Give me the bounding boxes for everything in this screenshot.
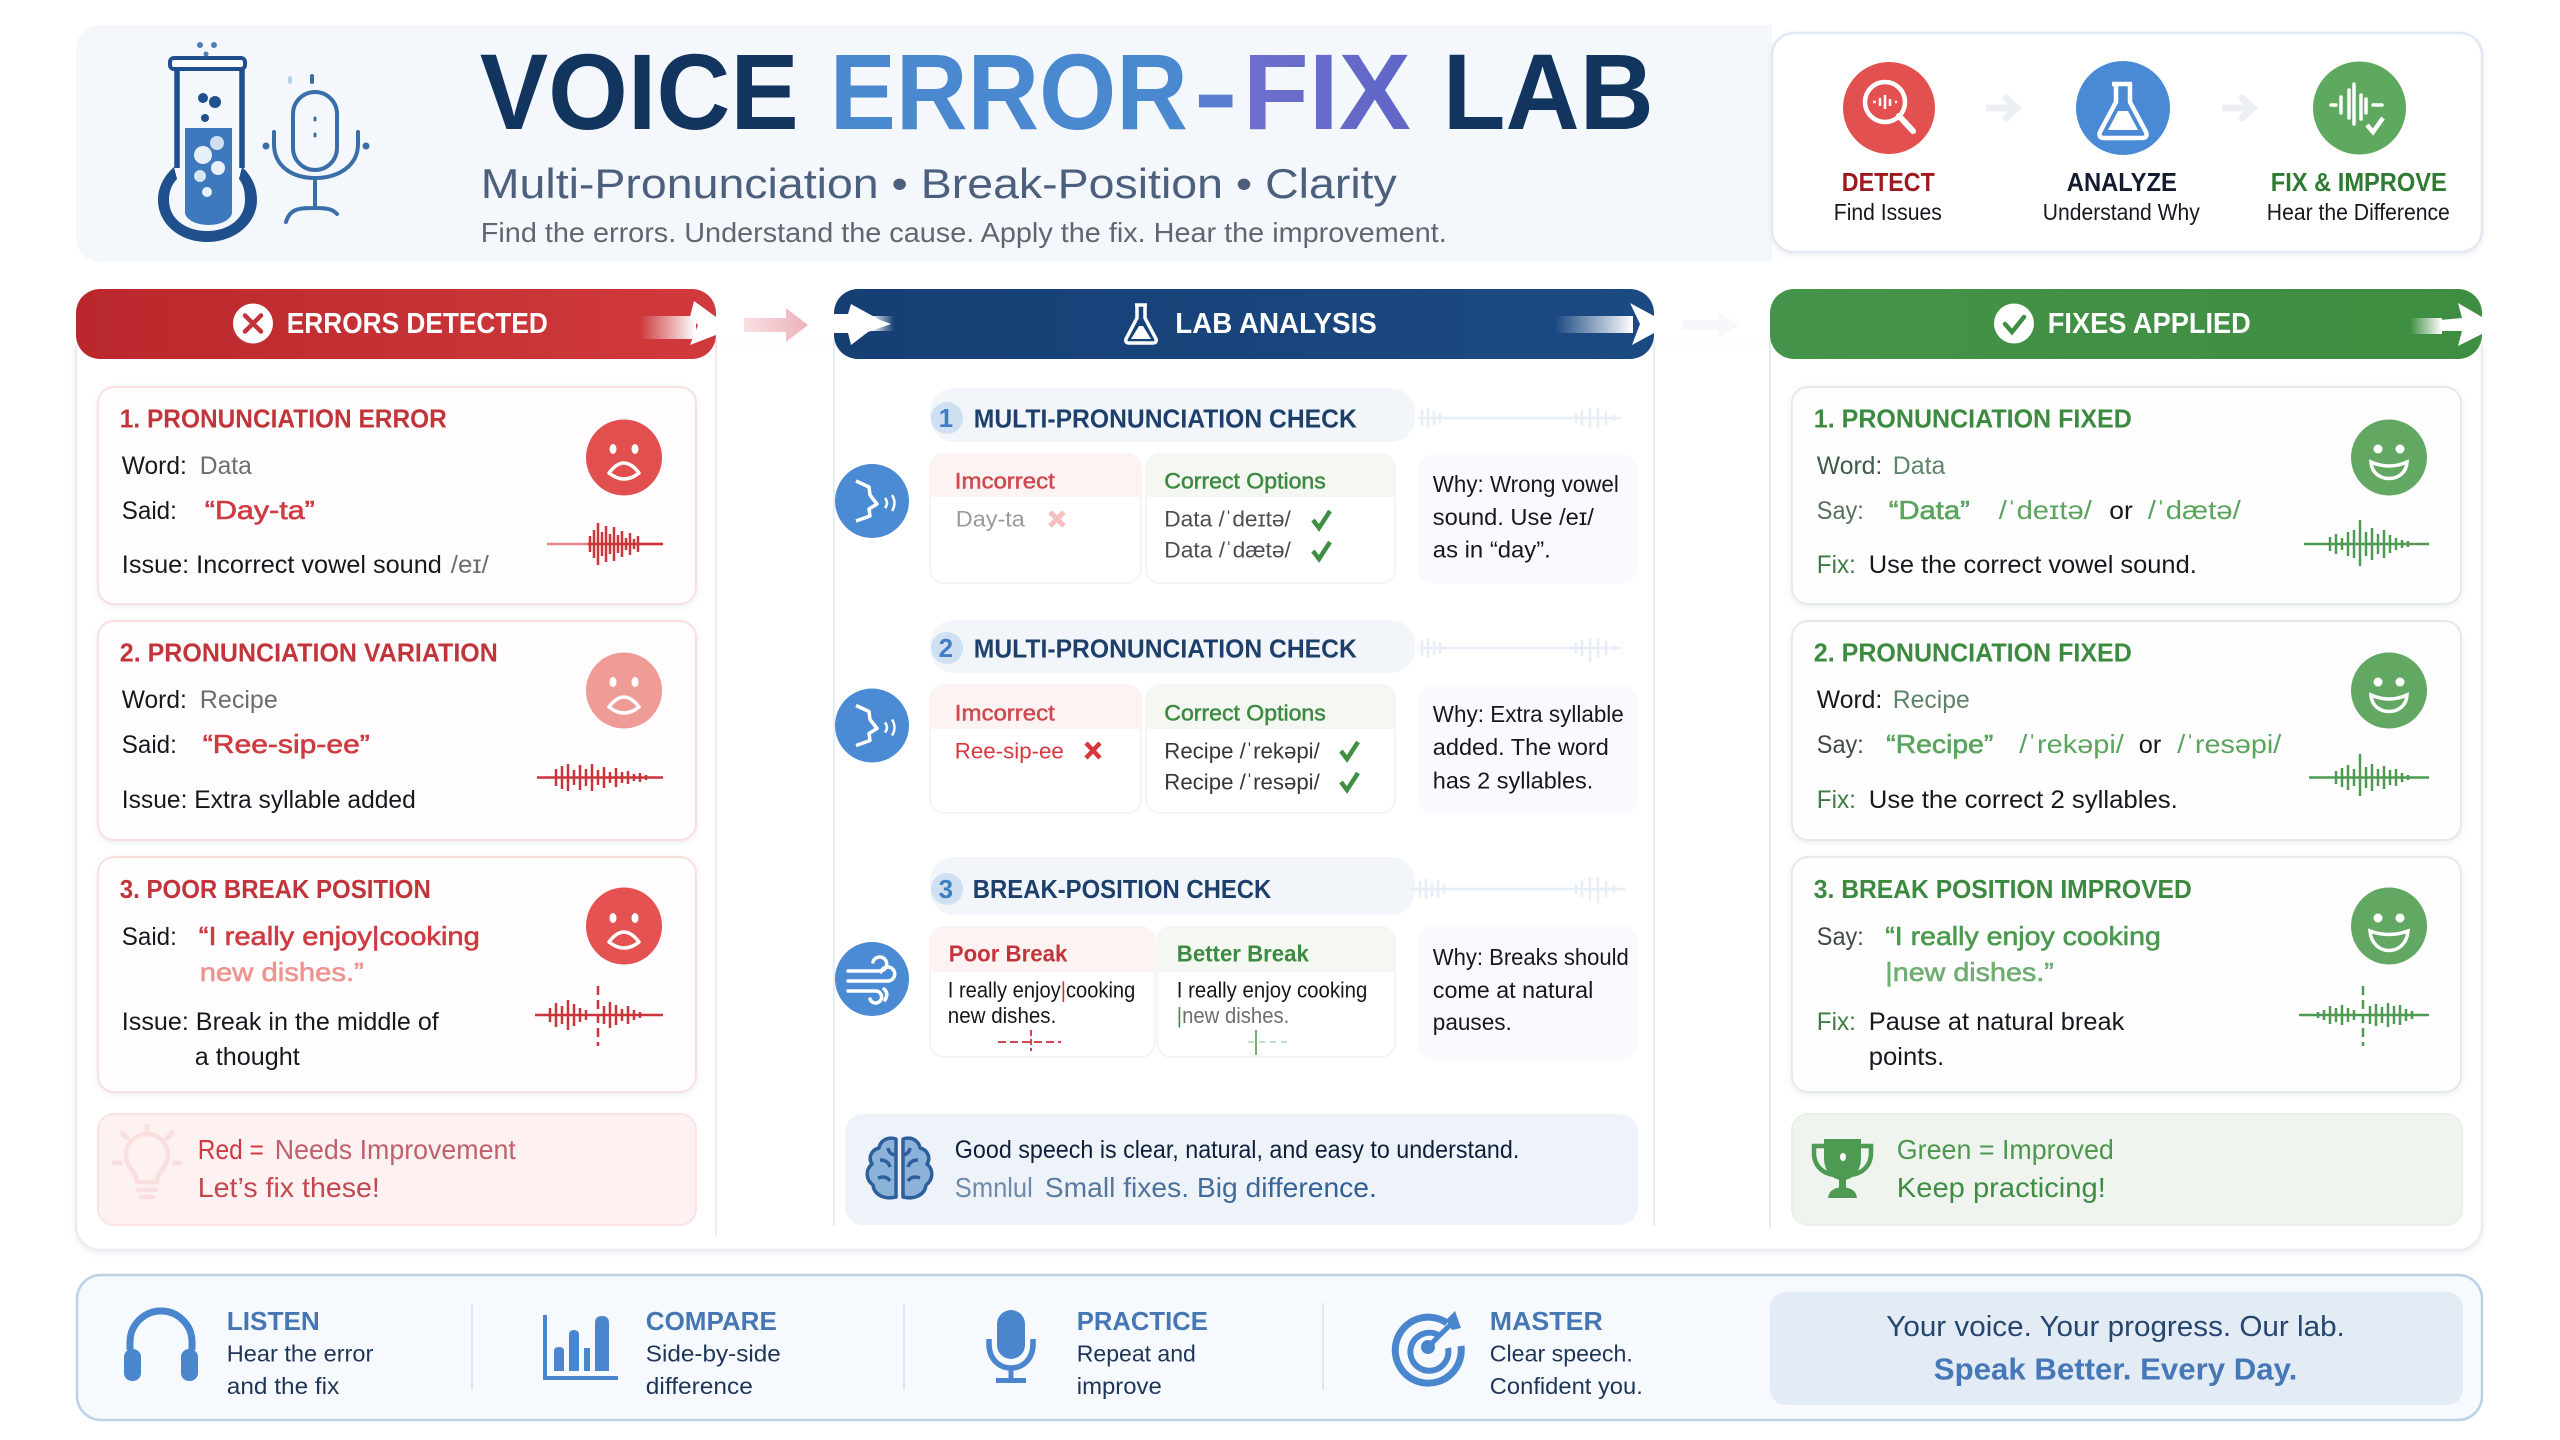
icon: test tube with bubbles — [158, 42, 257, 242]
card: why: come at natural — [1433, 977, 1593, 1003]
card: pronunciation fixed 1: Use the correct vowel sound. — [1869, 551, 2197, 579]
card: why: has 2 syllables. — [1433, 768, 1593, 794]
item: listen: and the fix — [227, 1373, 340, 1399]
icon: happy face — [2351, 420, 2427, 496]
panel: fixes applied — [1770, 289, 2482, 1228]
section heading: MULTI-PRONUNCIATION CHECK — [974, 404, 1357, 434]
callout: speak better — [1770, 1292, 2463, 1405]
card: why: pauses. — [1433, 1009, 1512, 1035]
item: compare: COMPARE — [646, 1306, 777, 1336]
card: pronunciation fixed 2: or — [2139, 731, 2161, 759]
card: poor break position: new dishes.” — [200, 957, 364, 987]
item: master: Confident you. — [1490, 1373, 1643, 1399]
card: correct options: Data /ˈdætə/ — [1164, 538, 1292, 562]
footer bar — [77, 1275, 2482, 1420]
card: correct options: Recipe /ˈrekəpi/ — [1164, 738, 1321, 764]
section heading — [930, 388, 1621, 442]
callout: speak better: Speak Better. Every Day. — [1934, 1352, 2297, 1386]
section 2: multi-pronunciation check — [835, 620, 1638, 815]
card: pronunciation fixed 2: Recipe — [1893, 686, 1970, 714]
card: why: added. The word — [1433, 734, 1609, 760]
card: poor break position: 3. POOR BREAK POSITION — [120, 874, 431, 904]
waveform with natural break — [2299, 1003, 2429, 1027]
card: pronunciation variation: 2. PRONUNCIATION VARIATION — [120, 638, 498, 668]
icon: happy face — [2351, 652, 2427, 728]
step: fix and improve: Hear the Difference — [2267, 199, 2450, 225]
card: pronunciation error: /eɪ/ — [451, 551, 489, 579]
card: correct options: Recipe /ˈresəpi/ — [1164, 770, 1321, 794]
card: why — [1417, 925, 1638, 1060]
card: pronunciation fixed 1 — [1792, 387, 2461, 604]
item: master — [1395, 1306, 1643, 1399]
card: break position improved: 3. BREAK POSITION IMPROVED — [1814, 874, 2192, 904]
card: why: Why: Wrong vowel — [1433, 471, 1619, 497]
card: why — [1417, 454, 1638, 584]
panel: errors detected — [76, 289, 716, 1236]
icon: light bulb — [114, 1126, 180, 1197]
card: break position improved: points. — [1869, 1043, 1944, 1071]
card: better break: Better Break — [1177, 940, 1309, 966]
legend: red needs improvement — [98, 1114, 696, 1225]
title: VOICE — [480, 31, 799, 152]
item: master: MASTER — [1490, 1306, 1603, 1336]
item: listen: Hear the error — [227, 1340, 374, 1366]
card: pronunciation error: Said: — [122, 497, 177, 525]
card: better break: I really enjoy cooking — [1177, 978, 1367, 1002]
card: poor break position: “I really enjoy|cooking — [199, 921, 480, 951]
card: pronunciation fixed 1: Data — [1893, 452, 1945, 480]
card: pronunciation error: Issue: Incorrect vowel sound — [122, 551, 442, 579]
icon: speaking profile — [835, 464, 909, 538]
card: poor break — [930, 927, 1154, 1057]
card: pronunciation fixed 2: /ˈresəpi/ — [2177, 729, 2282, 759]
icon: microphone — [989, 1310, 1033, 1383]
column header: lab analysis — [834, 289, 1654, 359]
column header: errors detected — [76, 289, 716, 359]
step: analyze — [2043, 61, 2200, 225]
icon: breath — [835, 942, 909, 1016]
item: listen: LISTEN — [227, 1306, 320, 1336]
waveform — [537, 764, 663, 791]
card: incorrect: Day-ta — [956, 506, 1026, 532]
waveform with mid-thought break — [535, 1000, 663, 1030]
card: poor break: Poor Break — [949, 940, 1067, 966]
card: pronunciation fixed 2 — [1792, 621, 2461, 840]
card: pronunciation variation: Word: — [122, 686, 187, 714]
card: why: sound. Use /eɪ/ — [1433, 504, 1594, 530]
legend: red needs improvement: Needs Improvement — [275, 1134, 516, 1165]
legend: green improved: Keep practicing! — [1897, 1172, 2106, 1203]
legend: green improved — [1792, 1114, 2462, 1225]
card: break position improved — [1792, 857, 2461, 1092]
icon: sad face — [586, 888, 662, 964]
item: listen — [124, 1306, 374, 1399]
item: compare: Side-by-side — [646, 1340, 781, 1366]
item: practice — [989, 1306, 1208, 1399]
card: pronunciation fixed 2: Fix: — [1817, 786, 1856, 814]
card: why: Why: Breaks should — [1433, 944, 1629, 970]
card: pronunciation error: Word: — [122, 452, 187, 480]
item: practice: improve — [1077, 1373, 1162, 1399]
card: incorrect — [930, 454, 1141, 583]
step: fix and improve: FIX & IMPROVE — [2271, 167, 2447, 197]
section heading: 2 — [939, 633, 953, 663]
section heading: 1 — [939, 403, 953, 433]
callout: good speech: Smnlul — [955, 1172, 1033, 1203]
icon: worried face — [586, 652, 662, 728]
title: - — [1194, 31, 1238, 152]
card: correct options — [1146, 685, 1395, 813]
card: pronunciation fixed 1: “Data” — [1889, 495, 1970, 525]
card: pronunciation fixed 2: Use the correct 2 syllables. — [1869, 786, 2178, 814]
card: incorrect: Ree-sip-ee — [955, 738, 1064, 764]
icon: trophy — [1814, 1139, 1871, 1198]
panel: process steps — [1772, 33, 2482, 252]
card: break position improved: Pause at natural break — [1869, 1008, 2125, 1036]
card: pronunciation fixed 1: or — [2109, 497, 2133, 525]
callout: good speech — [845, 1114, 1638, 1225]
title — [480, 31, 1654, 152]
card: pronunciation error: Data — [200, 452, 252, 480]
card: break position improved: Fix: — [1817, 1008, 1856, 1036]
card: pronunciation error: “Day-ta” — [205, 495, 315, 525]
legend: green improved: Green = Improved — [1897, 1134, 2114, 1165]
card: correct options: Data /ˈdeɪtə/ — [1164, 506, 1292, 532]
tagline: Find the errors. Understand the cause. Apply the fix. Hear the improvement. — [481, 217, 1447, 248]
card: better break: |new dishes. — [1177, 1003, 1289, 1028]
callout: speak better: Your voice. Your progress. Our lab. — [1886, 1311, 2345, 1343]
icon: speaking profile — [835, 688, 909, 762]
card: incorrect: Imcorrect — [955, 700, 1055, 726]
card: pronunciation fixed 2: Word: — [1817, 686, 1882, 714]
card: correct options — [1146, 454, 1395, 583]
item: compare — [543, 1306, 781, 1399]
icon: flask — [1126, 305, 1156, 343]
arrow — [2222, 96, 2253, 120]
card: pronunciation fixed 2: Say: — [1817, 731, 1864, 759]
callout: good speech: Good speech is clear, natural, and easy to understand. — [955, 1136, 1519, 1164]
card: pronunciation error — [98, 387, 696, 604]
waveform — [2304, 520, 2429, 566]
card: break position improved: Say: — [1817, 923, 1864, 951]
card: pronunciation fixed 1: /ˈdætə/ — [2148, 495, 2242, 525]
section heading — [930, 857, 1625, 915]
arrow: analysis to fixes — [1682, 312, 1740, 338]
section 3: break-position check — [835, 857, 1638, 1060]
step: detect: DETECT — [1842, 167, 1935, 197]
card: pronunciation variation — [98, 621, 696, 840]
title: FIX — [1243, 31, 1411, 152]
step: analyze: ANALYZE — [2067, 167, 2177, 197]
column header: fixes applied — [1770, 289, 2482, 359]
card: better break — [1157, 927, 1395, 1057]
icon: brain — [867, 1138, 932, 1198]
title: ERROR — [830, 31, 1188, 152]
outer frame — [76, 345, 2482, 1250]
card: poor break position: Said: — [122, 923, 177, 951]
card: pronunciation fixed 1: Word: — [1817, 452, 1882, 480]
card: why — [1417, 685, 1638, 815]
card: why: Why: Extra syllable — [1433, 701, 1624, 727]
card: pronunciation fixed 1: /ˈdeɪtə/ — [1999, 495, 2093, 525]
card: pronunciation variation: Said: — [122, 731, 177, 759]
header banner — [76, 25, 1772, 262]
card: pronunciation fixed 2: /ˈrekəpi/ — [2019, 729, 2125, 759]
icon: target with arrow — [1395, 1311, 1461, 1383]
waveform — [547, 543, 663, 545]
card: poor break: new dishes. — [948, 1003, 1056, 1028]
column header: errors detected: ERRORS DETECTED — [287, 308, 548, 340]
title: LAB — [1443, 31, 1654, 152]
subtitle: Multi-Pronunciation • Break-Position • Clarity — [481, 160, 1397, 207]
waveform — [2309, 754, 2429, 796]
icon: bar chart — [543, 1315, 618, 1380]
step: detect: Find Issues — [1834, 199, 1942, 225]
card: poor break: I really enjoy|cooking — [948, 978, 1135, 1002]
section heading: BREAK-POSITION CHECK — [973, 874, 1272, 904]
step: analyze: Understand Why — [2043, 199, 2200, 225]
item: practice: PRACTICE — [1077, 1306, 1208, 1336]
card: incorrect: Imcorrect — [955, 468, 1055, 494]
item: compare: difference — [646, 1373, 753, 1399]
card: pronunciation variation: “Ree-sip-ee” — [203, 729, 370, 759]
card: pronunciation fixed 1: Fix: — [1817, 551, 1856, 579]
card: pronunciation variation: Issue: Extra syllable added — [122, 786, 416, 814]
callout: good speech: Small fixes. Big difference. — [1045, 1172, 1377, 1203]
column header: lab analysis: LAB ANALYSIS — [1175, 308, 1377, 340]
legend: red needs improvement: Red = — [198, 1134, 264, 1165]
column header: fixes applied: FIXES APPLIED — [2048, 308, 2251, 340]
card: pronunciation fixed 2: 2. PRONUNCIATION FIXED — [1814, 638, 2132, 668]
step: fix and improve — [2267, 62, 2450, 225]
item: practice: Repeat and — [1077, 1340, 1196, 1366]
card: pronunciation fixed 1: Say: — [1817, 497, 1864, 525]
card: correct options: Correct Options — [1164, 700, 1326, 726]
arrow — [1986, 96, 2017, 120]
card: pronunciation fixed 2: “Recipe” — [1886, 729, 1993, 759]
icon: microphone — [264, 76, 368, 222]
icon: sad face — [586, 420, 662, 496]
card: break position improved: |new dishes.” — [1885, 957, 2054, 987]
section heading: 3 — [939, 874, 953, 904]
card: why: as in “day”. — [1433, 536, 1551, 562]
panel: lab analysis — [834, 289, 1654, 1226]
icon: headphones — [124, 1311, 198, 1381]
legend: red needs improvement: Let’s fix these! — [198, 1172, 380, 1203]
card: poor break position — [98, 857, 696, 1092]
card: incorrect — [930, 685, 1141, 813]
arrow: errors to analysis — [744, 308, 808, 342]
card: break position improved: “I really enjoy cooking — [1885, 921, 2161, 951]
section 1: multi-pronunciation check — [835, 388, 1638, 584]
card: correct options: Correct Options — [1164, 468, 1326, 494]
section heading: MULTI-PRONUNCIATION CHECK — [974, 634, 1357, 664]
section heading — [930, 620, 1621, 673]
step: detect — [1834, 62, 1942, 225]
card: poor break position: a thought — [195, 1043, 300, 1071]
card: pronunciation fixed 1: 1. PRONUNCIATION FIXED — [1814, 404, 2132, 434]
card: pronunciation variation: Recipe — [200, 686, 278, 714]
card: poor break position: Issue: Break in the middle of — [122, 1008, 439, 1036]
item: master: Clear speech. — [1490, 1340, 1633, 1366]
icon: happy face — [2351, 888, 2427, 964]
card: pronunciation error: 1. PRONUNCIATION ERROR — [120, 404, 447, 434]
